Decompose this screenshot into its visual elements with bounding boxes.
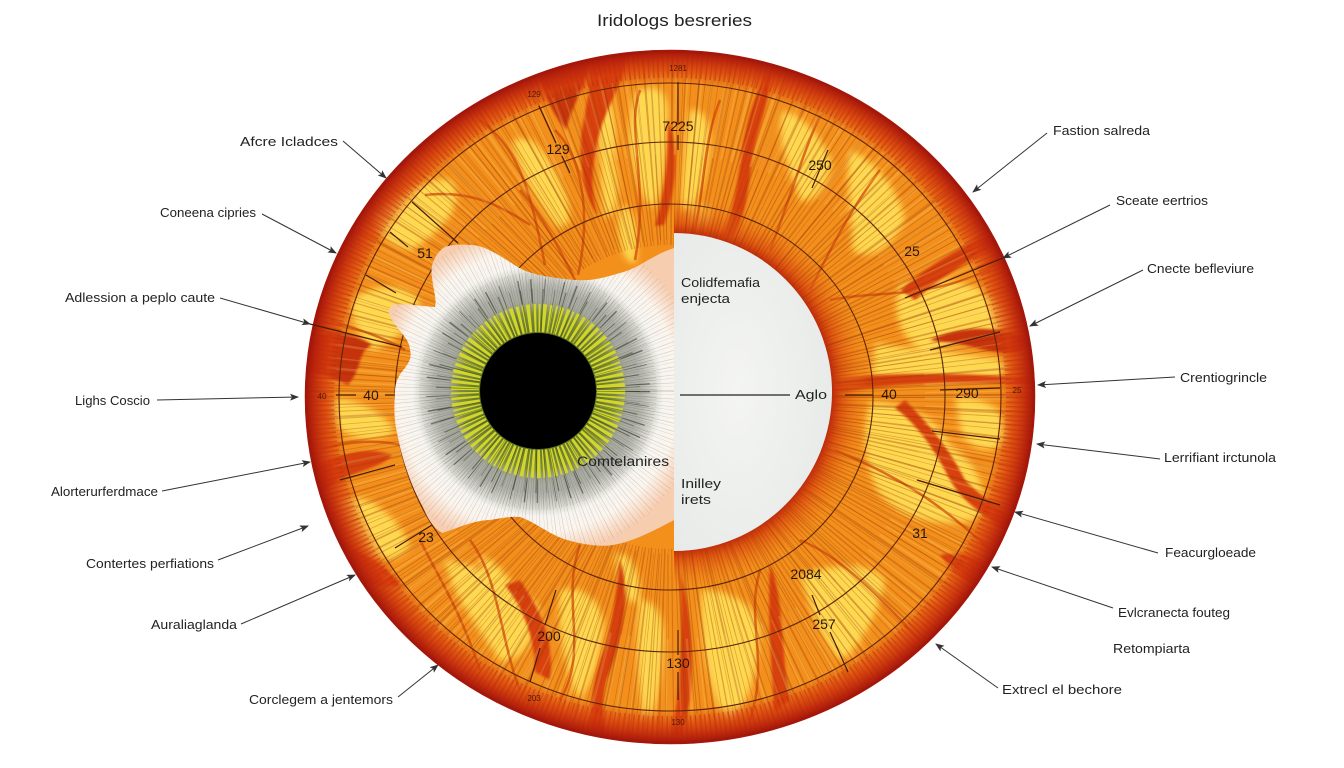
overlay label: Comtelanires [577, 454, 669, 469]
scale numbers: 31 [912, 525, 928, 541]
inner glow around white disc [674, 187, 879, 597]
scale numbers: 257 [812, 616, 836, 632]
outer rim [305, 50, 1035, 744]
scale numbers: 2084 [790, 566, 822, 582]
stroma blob [389, 245, 674, 546]
concentric rings [339, 83, 1001, 711]
stroma fibres [403, 256, 673, 526]
scale numbers: 290 [955, 385, 979, 401]
callout: Corclegem a jentemors: Corclegem a jentemors [249, 692, 394, 707]
callout: Crentiogrincle [1038, 370, 1267, 385]
callout: Extrecl el bechore [936, 644, 1122, 697]
scale numbers: 129 [546, 141, 570, 157]
scale numbers: 1281 [669, 64, 687, 73]
disc text [680, 275, 827, 507]
callout: Crentiogrincle: Crentiogrincle [1180, 370, 1267, 385]
callout: Lighs Coscio [75, 393, 298, 408]
callout: Lerrifiant irctunola [1037, 444, 1277, 465]
radial scale ticks [310, 82, 1003, 700]
callout: Afcre Icladces: Afcre Icladces [240, 134, 339, 149]
callout: Sceate eertrios: Sceate eertrios [1116, 193, 1209, 208]
scale numbers [318, 64, 1022, 727]
pupil [480, 333, 596, 449]
scale numbers: 200 [537, 628, 561, 644]
callout: Alorterurferdmace [51, 462, 310, 499]
callout: Cnecte befleviure: Cnecte befleviure [1147, 261, 1254, 276]
scale numbers: 7225 [662, 118, 694, 134]
disc text: Colidfemafia [681, 275, 761, 290]
scale numbers: 129 [527, 90, 541, 99]
scale numbers: 25 [904, 243, 920, 259]
scale numbers: 25 [1013, 386, 1022, 395]
pupil and stroma panel [389, 245, 674, 546]
callout: Extrecl el bechore: Extrecl el bechore [1002, 682, 1122, 697]
scale numbers: 40 [363, 387, 379, 403]
scale numbers: 23 [418, 529, 434, 545]
disc text: enjecta [681, 291, 731, 306]
scale numbers: 130 [666, 655, 690, 671]
white half disc [674, 233, 832, 551]
callout: Corclegem a jentemors [249, 665, 438, 707]
disc text: Aglo [795, 387, 827, 402]
scale numbers: 203 [527, 694, 541, 703]
callout: Auraliaglanda: Auraliaglanda [151, 617, 238, 632]
callout: Sceate eertrios [1003, 193, 1209, 258]
disc text: Inilley [681, 476, 722, 491]
left callouts [51, 134, 438, 707]
callout: Fastion salreda: Fastion salreda [1053, 123, 1151, 138]
scale numbers: 51 [417, 245, 433, 261]
label: Retompiarta: Retompiarta [1113, 641, 1191, 656]
callout: Afcre Icladces [240, 134, 386, 178]
right callouts [936, 123, 1277, 697]
callout: Lerrifiant irctunola: Lerrifiant irctunola [1164, 450, 1277, 465]
callout: Evlcranecta fouteg [992, 567, 1230, 620]
callout: Alorterurferdmace: Alorterurferdmace [51, 484, 158, 499]
callout: Cnecte befleviure [1030, 261, 1254, 326]
red flame streaks [306, 52, 1030, 740]
callout: Lighs Coscio: Lighs Coscio [75, 393, 150, 408]
callout: Contertes perfiations: Contertes perfiations [86, 556, 215, 571]
callout: Adlession a peplo caute: Adlession a peplo caute [65, 290, 215, 305]
yellow-green collarette [446, 299, 630, 483]
callout: Coneena cipries: Coneena cipries [160, 205, 257, 220]
scale numbers: 250 [808, 157, 832, 173]
radial fibres [320, 64, 1020, 729]
callout: Evlcranecta fouteg: Evlcranecta fouteg [1118, 605, 1230, 620]
scale numbers: 40 [318, 392, 327, 401]
callout: Fastion salreda [973, 123, 1151, 192]
callout: Feacurgloeade [1015, 512, 1256, 560]
callout: Feacurgloeade: Feacurgloeade [1165, 545, 1256, 560]
scale numbers: 130 [671, 718, 685, 727]
iris outer disc [305, 50, 1035, 744]
disc text: irets [681, 492, 712, 507]
callout: Coneena cipries [160, 205, 336, 253]
callout: Auraliaglanda [151, 575, 355, 632]
title: Iridologs besreries [597, 11, 752, 30]
flowing streak lines [320, 90, 1000, 720]
callout: Adlession a peplo caute [65, 290, 310, 324]
callout: Contertes perfiations [86, 526, 308, 571]
scale numbers: 40 [881, 386, 897, 402]
yellow fibre patches [330, 88, 1012, 722]
